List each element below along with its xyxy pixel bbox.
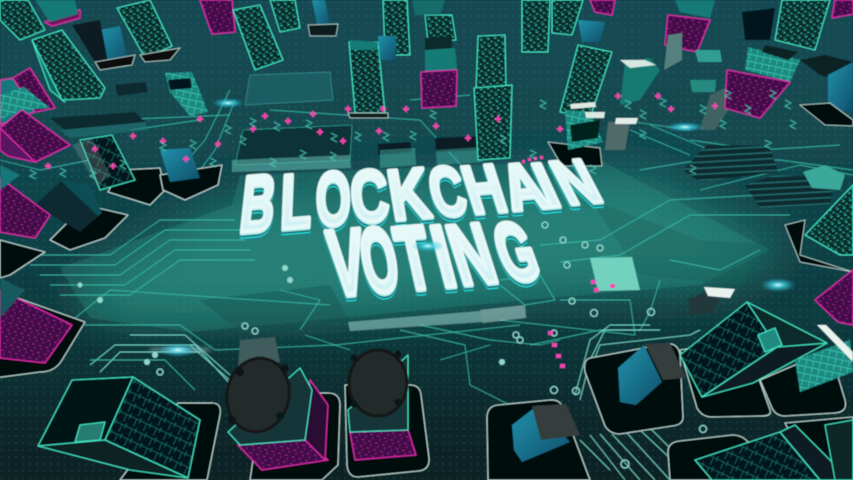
dark capsule xyxy=(605,122,630,150)
gray cylinder xyxy=(664,33,682,70)
tower group: top left xyxy=(0,0,180,162)
tile: lower left xyxy=(0,290,85,378)
blue cylinder right xyxy=(828,62,853,112)
chips row upper board xyxy=(50,72,483,172)
headline: BLOCKCHAIN VOTING: C xyxy=(421,152,474,231)
headline: BLOCKCHAIN VOTING: O xyxy=(315,156,352,243)
blue cup xyxy=(578,20,605,42)
tile: left block base xyxy=(50,205,128,250)
headline: BLOCKCHAIN VOTING xyxy=(236,146,613,316)
tower nine xyxy=(522,0,550,52)
tower six xyxy=(349,42,385,113)
blue cup xyxy=(160,148,200,182)
magenta block centre xyxy=(421,70,457,108)
lower tower with white caps xyxy=(548,102,605,166)
tile: center right xyxy=(345,385,429,477)
tile: right three xyxy=(680,340,770,417)
magenta pads xyxy=(45,93,718,368)
headline: BLOCKCHAIN VOTING: N xyxy=(437,205,507,303)
magenta roof xyxy=(590,0,615,15)
teal glowing plate behind the title xyxy=(60,160,770,332)
tile: right four xyxy=(760,350,846,416)
magenta corner xyxy=(832,0,853,18)
tower two xyxy=(117,0,172,58)
tile: far corner right xyxy=(785,417,853,480)
tile: cup base xyxy=(160,165,222,200)
headline: BLOCKCHAIN VOTING: I xyxy=(523,151,570,221)
tower group: top middle xyxy=(200,0,457,118)
tile: center left xyxy=(250,393,340,480)
bright chip and pads right of title xyxy=(348,257,640,331)
headline: BLOCKCHAIN VOTING: V xyxy=(322,210,371,316)
tower one xyxy=(32,30,105,102)
blue cylinder xyxy=(100,26,128,62)
headline: BLOCKCHAIN VOTING: T xyxy=(387,207,441,309)
teal left wedge xyxy=(0,165,20,190)
capsule right xyxy=(700,88,735,130)
sensor block one xyxy=(220,352,328,470)
headline: BLOCKCHAIN VOTING: N xyxy=(539,146,613,217)
tower group: small left tower xyxy=(0,72,208,363)
tower group: top right xyxy=(474,0,853,325)
base xyxy=(95,55,135,70)
headline: BLOCKCHAIN VOTING: C xyxy=(347,155,392,239)
solder rings xyxy=(78,222,706,468)
magenta tower far left xyxy=(0,68,55,125)
headline: BLOCKCHAIN VOTING: H xyxy=(454,151,515,228)
blue post two xyxy=(618,343,686,405)
teal roof block xyxy=(0,87,50,120)
teal chip xyxy=(695,50,722,62)
teal-top magenta block xyxy=(0,110,70,162)
tower ten xyxy=(552,0,583,35)
magenta tower xyxy=(200,0,235,34)
tower four xyxy=(233,5,283,70)
block left middle xyxy=(35,180,100,232)
headline: BLOCKCHAIN VOTING: K xyxy=(382,153,435,235)
blue stub xyxy=(312,0,330,28)
headline: BLOCKCHAIN VOTING: I xyxy=(422,208,464,306)
heat sink pair xyxy=(683,145,845,208)
tower five xyxy=(270,0,300,32)
black column xyxy=(742,8,775,40)
wireframe cube bottom right xyxy=(695,425,850,480)
tile: bottom left cube xyxy=(120,403,220,480)
green tower right xyxy=(775,0,830,50)
wireframe cube right xyxy=(680,302,827,397)
magenta block xyxy=(665,15,710,52)
tile: left middle xyxy=(0,240,45,278)
white capsule xyxy=(688,287,735,316)
right teal tower xyxy=(805,185,853,255)
bottom left cube xyxy=(38,377,200,478)
headline: BLOCKCHAIN VOTING: A xyxy=(490,150,558,225)
magenta big block xyxy=(725,70,790,118)
teal wedge tower xyxy=(745,47,800,82)
black shoulder xyxy=(72,20,108,62)
striped stack xyxy=(165,72,208,116)
headline: BLOCKCHAIN VOTING: G xyxy=(481,204,550,299)
magenta roof xyxy=(45,10,80,26)
striped connector xyxy=(795,340,853,392)
white capped pair xyxy=(620,58,660,105)
tower three corner xyxy=(0,0,45,40)
headline: BLOCKCHAIN VOTING: B xyxy=(236,157,280,249)
headline: BLOCKCHAIN VOTING: O xyxy=(352,209,406,313)
tower eleven xyxy=(560,45,612,118)
blue post one xyxy=(512,404,580,462)
right magenta xyxy=(815,270,853,325)
magenta lower left xyxy=(0,290,72,363)
headline: BLOCKCHAIN VOTING: L xyxy=(279,157,313,245)
tower seven xyxy=(383,0,410,55)
round sensor xyxy=(349,350,407,416)
round sensor xyxy=(220,352,296,438)
lens flares xyxy=(150,98,796,357)
tile: bottom right two xyxy=(585,344,683,434)
tower eight xyxy=(474,35,512,160)
magenta left middle xyxy=(0,178,50,238)
component glyph clusters xyxy=(30,90,796,179)
tile: small tower base xyxy=(108,168,165,205)
white bar xyxy=(817,325,853,362)
grey cap behind sensor xyxy=(238,337,280,368)
tile: corner bottom right xyxy=(668,435,800,480)
tile: bottom right one xyxy=(487,400,590,480)
sensor block two xyxy=(348,350,416,460)
